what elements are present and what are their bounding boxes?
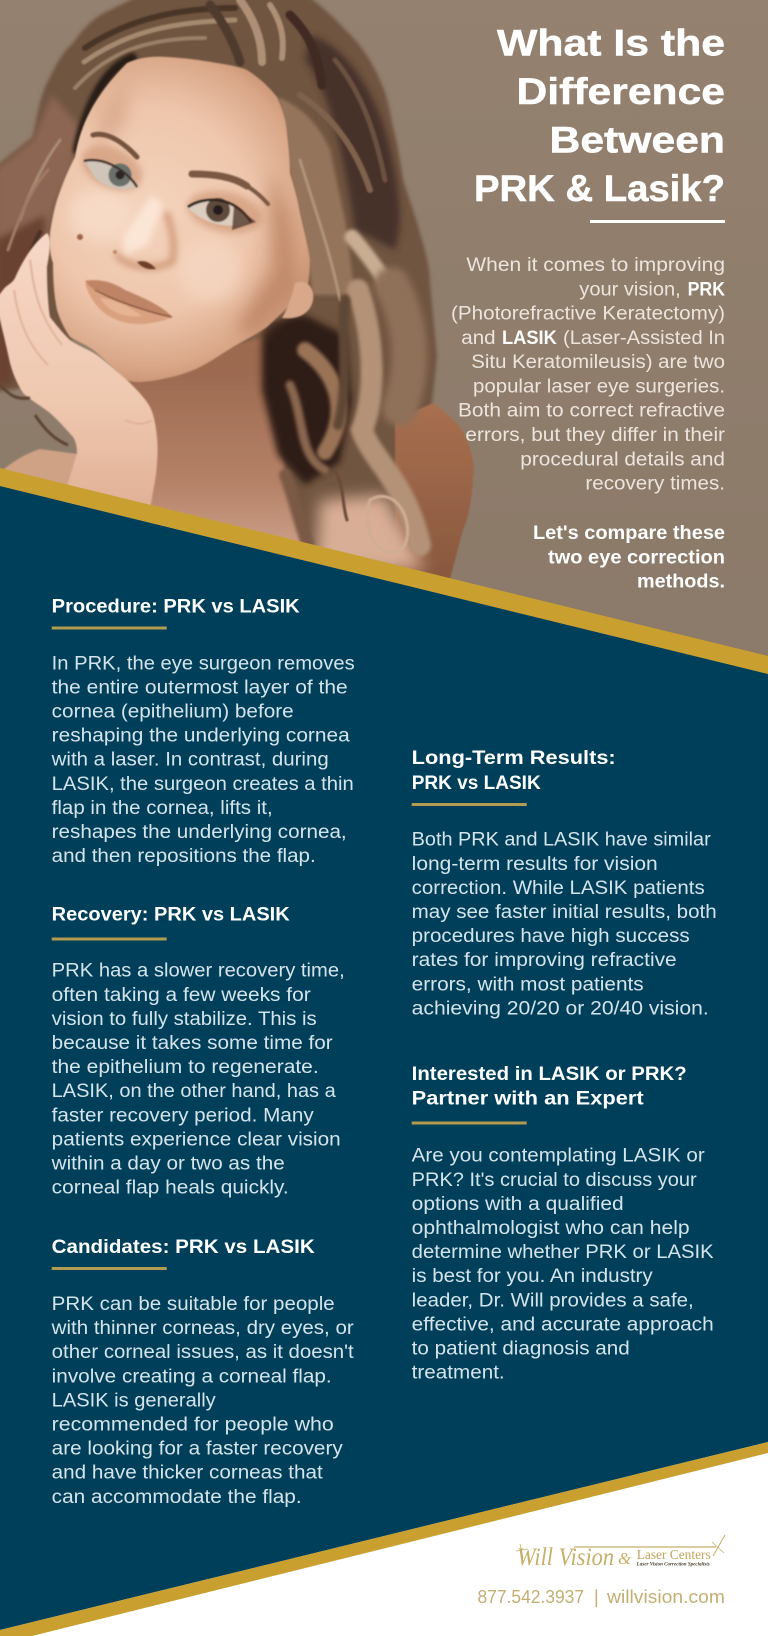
body: recovery: often taking a few weeks for [52, 985, 311, 1006]
body: procedure: flap in the cornea, lifts it, [52, 798, 273, 819]
gold rule [52, 938, 167, 940]
blonde highlight [352, 237, 398, 300]
body: recovery: because it takes some time for [52, 1033, 333, 1054]
body: interested: effective, and accurate approach [412, 1314, 714, 1335]
body: candidates: LASIK is generally [52, 1390, 216, 1411]
heading: interested [412, 1064, 687, 1109]
body: long-term results: errors, with most patients [412, 974, 644, 995]
lower hair dark mass [262, 315, 352, 485]
body: interested: leader, Dr. Will provides a safe, [412, 1290, 694, 1311]
heading: long-term results: Long-Term Results: [412, 748, 616, 769]
logo swoosh and stars [516, 1535, 725, 1558]
body: recovery: patients experience clear vision [52, 1129, 341, 1150]
cheek highlight right [178, 238, 242, 302]
body: interested [412, 1146, 714, 1384]
body: interested: is best for you. An industry [412, 1266, 653, 1287]
body: recovery: the epithelium to regenerate. [52, 1057, 319, 1078]
dark hairline under parting [78, 58, 132, 150]
face [50, 57, 310, 382]
collarbone skin [315, 495, 425, 570]
body: long-term results: long-term results for vision [412, 854, 658, 875]
body: interested: determine whether PRK or LASIK [412, 1242, 714, 1263]
body: recovery [51, 961, 345, 1199]
intro paragraph: When it comes to improving [466, 255, 725, 276]
gold rule [52, 626, 167, 630]
body: long-term results: rates for improving refractive [412, 950, 677, 971]
intro paragraph: procedural details and [520, 449, 725, 470]
logo: Will Vision & Laser Centers: Will Vision [517, 1544, 614, 1571]
intro paragraph: (Laser-Assisted In [563, 328, 725, 349]
body: recovery: vision to fully stabilize. This is [52, 1009, 317, 1030]
body: recovery: LASIK, on the other hand, has a [52, 1081, 336, 1102]
body: candidates: and have thicker corneas that [52, 1463, 323, 1484]
intro paragraph: popular laser eye surgeries. [473, 376, 725, 397]
hair curls [285, 285, 420, 552]
body: long-term results: achieving 20/20 or 20/40 vision. [412, 998, 709, 1020]
body: interested: ophthalmologist who can help [412, 1218, 690, 1239]
logo: Will Vision & Laser Centers: Laser Centers [637, 1547, 711, 1562]
body: interested: Are you contemplating LASIK or [412, 1146, 705, 1167]
body: long-term results: procedures have high success [412, 926, 690, 947]
body: recovery: PRK has a slower recovery time, [52, 961, 345, 982]
logo: Will Vision & Laser Centers: & [618, 1549, 632, 1568]
lower left reddish hair [0, 215, 45, 385]
upper right dark hair [305, 35, 400, 250]
heading: recovery: Recovery: PRK vs LASIK [52, 905, 290, 926]
section: candidates [51, 1237, 354, 1508]
body: procedure: reshapes the underlying cornea, [52, 822, 347, 843]
heading: long-term results: PRK vs LASIK [412, 773, 541, 794]
intro call to action: Let's compare these [533, 523, 725, 544]
body: interested: options with a qualified [412, 1194, 624, 1215]
intro paragraph: your vision, [579, 279, 681, 300]
top gold diagonal band [0, 468, 768, 674]
intro paragraph: recovery times. [585, 474, 725, 495]
body: procedure: LASIK, the surgeon creates a thin [52, 774, 354, 795]
cheek highlight [68, 189, 132, 241]
eyebrows [93, 134, 268, 204]
contact line [478, 1587, 725, 1607]
body: procedure: the entire outermost layer of the [52, 677, 348, 698]
body: procedure [51, 653, 355, 867]
intro paragraph: PRK [688, 279, 725, 300]
body: procedure: cornea (epithelium) before [52, 702, 294, 722]
title: Between [550, 120, 725, 161]
white title rule [590, 220, 725, 223]
intro paragraph: (Photorefractive Keratectomy) [451, 304, 725, 325]
heading: procedure: Procedure: PRK vs LASIK [52, 597, 300, 618]
heading: candidates: Candidates: PRK vs LASIK [52, 1237, 315, 1258]
body: procedure: with a laser. In contrast, during [51, 750, 329, 771]
gold rule [52, 1267, 167, 1270]
intro call to action: two eye correction [548, 548, 725, 568]
body: candidates: can accommodate the flap. [52, 1487, 302, 1508]
body: candidates: PRK can be suitable for people [52, 1294, 335, 1315]
left eye [84, 160, 137, 190]
contact line: | [594, 1587, 599, 1607]
heading: interested: Interested in LASIK or PRK? [412, 1064, 687, 1085]
left hair lobe [0, 95, 78, 300]
contact line: willvision.com [606, 1587, 725, 1607]
wisps of hair behind hand [0, 385, 68, 445]
intro paragraph: Situ Keratomileusis) are two [471, 352, 725, 373]
body: procedure: reshaping the underlying cornea [52, 726, 350, 747]
body: long-term results: may see faster initial results, both [412, 902, 717, 923]
body: long-term results: correction. While LASIK patients [412, 878, 705, 899]
hair mass [0, 0, 437, 560]
portrait photo of a smiling woman [0, 0, 474, 590]
section: long-term results [412, 748, 717, 1020]
left chest strip [0, 449, 85, 505]
section: interested [412, 1064, 714, 1384]
body: recovery: within a day or two as the [51, 1154, 285, 1174]
body: recovery: corneal flap heals quickly. [52, 1178, 289, 1199]
temple shadow [235, 170, 300, 335]
body: long-term results [412, 830, 717, 1020]
gold rule [412, 1122, 527, 1124]
forehead shadow [95, 80, 130, 150]
body: candidates: other corneal issues, as it doesn't [52, 1342, 354, 1363]
intro paragraph: and [461, 328, 496, 349]
hand on cheek [0, 233, 158, 510]
mole [77, 234, 83, 240]
logo: Will Vision & Laser Centers: Laser Vision Correction Specialists [636, 1563, 710, 1568]
body: interested: treatment. [412, 1363, 505, 1384]
title: PRK & Lasik? [474, 168, 725, 209]
title [474, 22, 725, 209]
eye socket shading [75, 136, 266, 239]
lips [85, 280, 172, 324]
intro call to action: methods. [637, 572, 725, 593]
body: long-term results: Both PRK and LASIK have similar [412, 830, 711, 851]
shoulder [395, 403, 474, 590]
heading: interested: Partner with an Expert [412, 1088, 644, 1109]
body: candidates: are looking for a faster recovery [52, 1439, 343, 1460]
finger shadow lines [14, 260, 152, 424]
intro call to action [533, 523, 725, 593]
inner hair tan strip [277, 97, 355, 295]
neck and chest [120, 335, 310, 570]
body: candidates: with thinner corneas, dry eyes, or [51, 1318, 354, 1339]
body: interested: to patient diagnosis and [412, 1338, 630, 1360]
section: procedure [51, 597, 355, 867]
body: recovery: faster recovery period. Many [52, 1105, 314, 1126]
right eye [188, 198, 256, 230]
intro paragraph: Both aim to correct refractive [458, 401, 725, 422]
intro paragraph: LASIK [502, 328, 557, 349]
body: candidates: involve creating a corneal flap. [52, 1366, 332, 1387]
white footer area [0, 1453, 768, 1636]
intro paragraph: errors, but they differ in their [465, 425, 726, 446]
logo: Will Vision & Laser Centers [516, 1535, 725, 1571]
hair strands [8, 0, 385, 300]
nose [113, 195, 174, 269]
intro paragraph [451, 255, 726, 495]
body: procedure: and then repositions the flap. [52, 846, 316, 867]
contact line: 877.542.3937 [478, 1587, 584, 1607]
title: Difference [516, 71, 725, 112]
heading: long-term results [412, 748, 616, 794]
diagonal navy panel [0, 486, 768, 1630]
ear [282, 282, 313, 318]
tan photo background [0, 0, 768, 700]
title: What Is the [497, 22, 725, 64]
body: interested: PRK? It's crucial to discuss your [412, 1170, 697, 1191]
section: recovery [51, 905, 345, 1199]
body: candidates: recommended for people who [52, 1414, 334, 1436]
gold rule [412, 803, 527, 806]
body: candidates [51, 1294, 354, 1508]
bottom gold diagonal band [0, 1442, 768, 1636]
body: procedure: In PRK, the eye surgeon removes [52, 653, 355, 674]
